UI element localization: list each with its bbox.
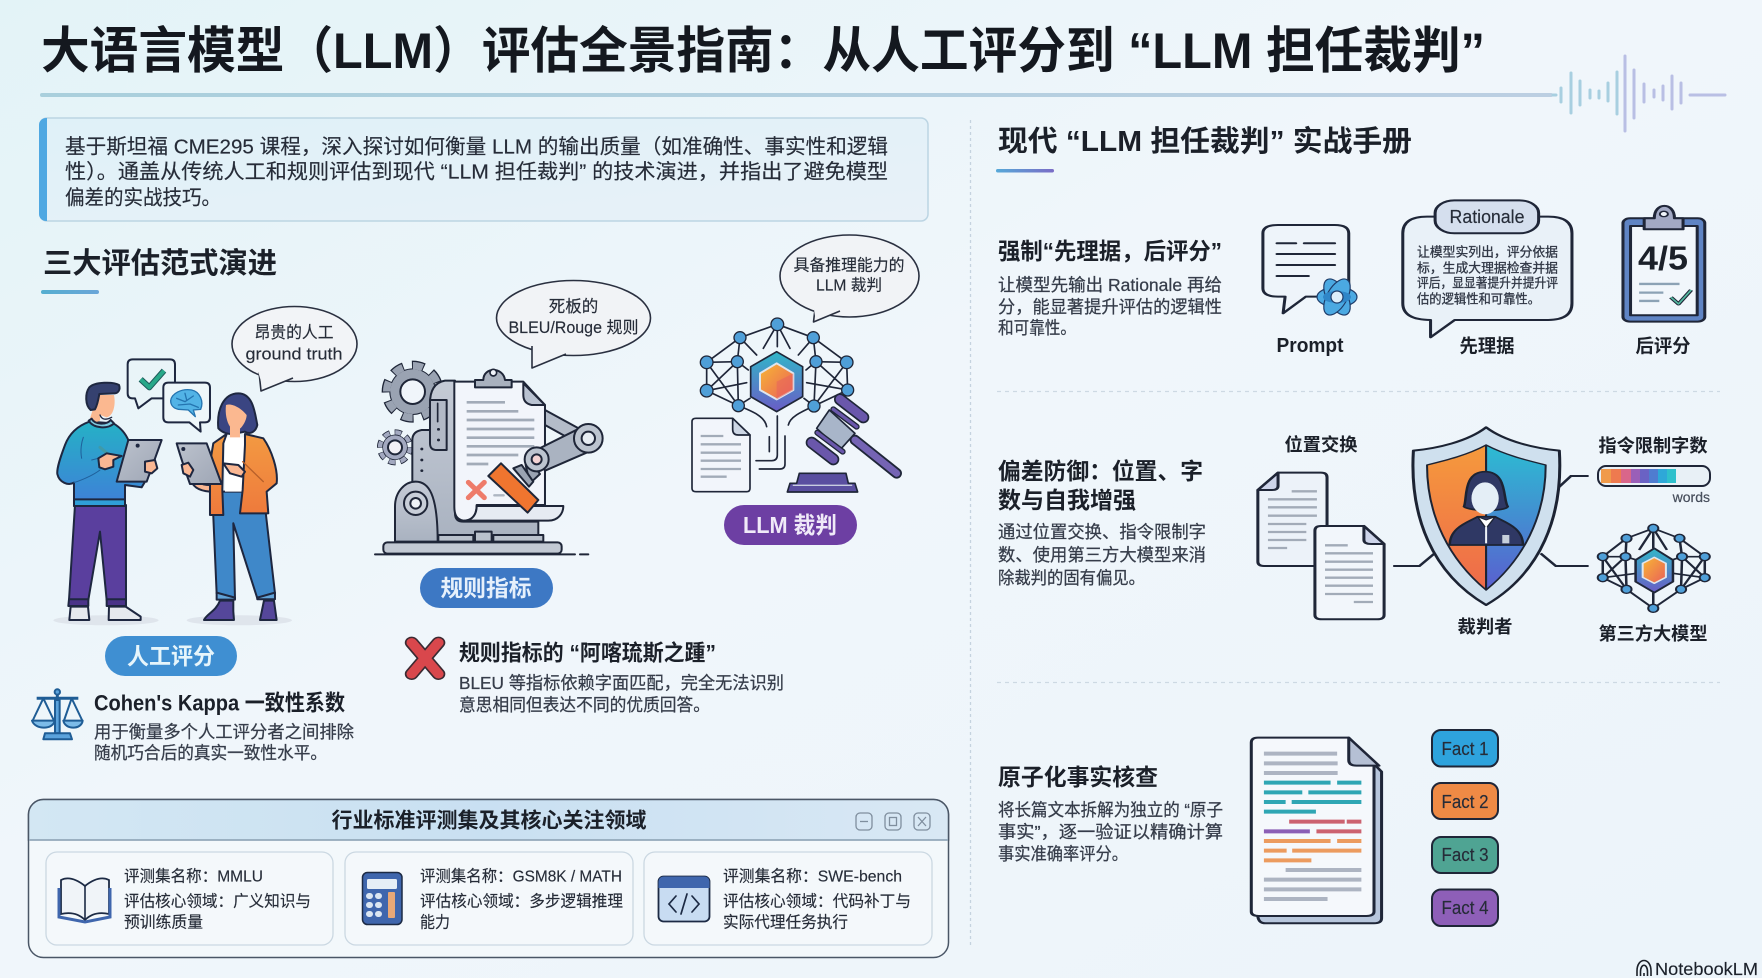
heading: three paradigms — [41, 247, 277, 294]
brain chat bubble — [163, 383, 210, 432]
pill: rule metrics: 规则指标 — [440, 575, 532, 601]
block text: bias defense: 除裁判的固有偏见。 — [998, 568, 1145, 588]
block text: bias defense: 数与自我增强 — [998, 487, 1136, 513]
machine body — [375, 381, 588, 554]
neural network — [700, 318, 854, 469]
card: MMLU: 评测集名称：MMLU — [124, 868, 263, 886]
pill: human scoring: 人工评分 — [127, 643, 215, 669]
gavel — [787, 399, 897, 492]
intro callout — [39, 118, 928, 221]
Achilles heel note: 规则指标的 “阿喀琉斯之踵” — [459, 640, 716, 666]
panel: benchmark datasets — [28, 800, 948, 958]
icon: judge shield — [1413, 427, 1560, 605]
chip: Fact 2 — [1432, 783, 1498, 819]
chip: Fact 3: Fact 3 — [1442, 845, 1488, 865]
label: word limit: 指令限制字数 — [1598, 435, 1708, 456]
title rule with audio waveform — [40, 56, 1725, 131]
speech bubble: expensive human ground truth — [232, 306, 357, 391]
icon: score clipboard: 4/5 — [1638, 240, 1688, 276]
speech bubble: reasoning LLM judge: LLM 裁判 — [816, 276, 882, 294]
Cohen's Kappa note: 随机巧合后的真实一致性水平。 — [94, 743, 327, 763]
speech bubble: reasoning LLM judge: 具备推理能力的 — [794, 256, 904, 274]
block text: atomic fact check — [998, 764, 1223, 864]
chip: Fact 2: Fact 2 — [1442, 792, 1488, 812]
block text: rationale first: 强制“先理据，后评分” — [998, 238, 1222, 264]
Achilles heel note: BLEU 等指标依赖字面匹配，完全无法识别 — [459, 673, 784, 693]
block text: rationale first: 让模型先输出 Rationale 再给 — [998, 275, 1222, 295]
check chat bubble — [128, 359, 175, 408]
rationale speech bubble: 让模型实列出，评分依据 — [1417, 244, 1558, 260]
man upper body — [57, 383, 162, 506]
block text: bias defense: 通过位置交换、指令限制字 — [998, 522, 1206, 542]
rear arm — [545, 410, 582, 442]
block text: atomic fact check: 事实”，逐一验证以精确计算 — [998, 822, 1223, 842]
block text: rationale first: 分，能显著提升评估的逻辑性 — [998, 297, 1222, 317]
label: post score: 后评分 — [1636, 336, 1690, 356]
legs and shoes — [53, 492, 292, 625]
woman upper body — [177, 393, 277, 515]
judge figure — [1450, 472, 1523, 545]
icon: third-party model network — [1598, 524, 1710, 612]
block text: rationale first: 和可靠性。 — [998, 318, 1076, 338]
pill: rule metrics — [420, 568, 553, 608]
label: judge: 裁判者 — [1458, 617, 1512, 637]
card: GSM8K / MATH — [345, 852, 633, 945]
speech bubble: rigid BLEU/Rouge rules: BLEU/Rouge 规则 — [508, 318, 638, 337]
block text: bias defense: 偏差防御：位置、字 — [998, 458, 1203, 484]
pill: LLM judge — [724, 505, 857, 545]
heading: LLM judge playbook: 现代 “LLM 担任裁判” 实战手册 — [998, 125, 1412, 158]
Cohen's Kappa note — [94, 690, 354, 763]
card: MMLU: 预训练质量 — [124, 914, 203, 932]
connector lines to shield — [1393, 476, 1589, 566]
heading: three paradigms: 三大评估范式演进 — [43, 247, 277, 280]
chip: Fact 4 — [1432, 890, 1498, 926]
Achilles heel note — [459, 640, 784, 715]
card: GSM8K / MATH: 评估核心领域：多步逻辑推理 — [420, 892, 623, 910]
intro callout: 偏差的实战技巧。 — [65, 186, 221, 210]
label: third-party model: 第三方大模型 — [1598, 623, 1708, 644]
icon: decomposed document — [1251, 738, 1382, 923]
card: SWE-bench: 评测集名称：SWE-bench — [723, 868, 902, 886]
icon: score clipboard — [1623, 206, 1705, 322]
block text: bias defense — [998, 458, 1206, 588]
document — [692, 418, 750, 492]
icon: swapped documents — [1258, 473, 1384, 619]
block text: atomic fact check: 原子化事实核查 — [998, 764, 1158, 790]
rationale speech bubble: Rationale — [1450, 207, 1524, 227]
word limit gauge: words — [1672, 489, 1710, 505]
chip: Fact 3 — [1432, 837, 1498, 873]
Cohen's Kappa note: 用于衡量多个人工评分者之间排除 — [94, 722, 354, 742]
card: SWE-bench — [644, 852, 932, 945]
speech bubble: expensive human ground truth: 昂贵的人工 — [254, 323, 334, 342]
panel heading: 行业标准评测集及其核心关注领域 — [332, 808, 646, 832]
rationale speech bubble — [1403, 200, 1572, 337]
word limit gauge — [1598, 466, 1710, 505]
Cohen's Kappa note: Cohen's Kappa 一致性系数 — [94, 690, 345, 716]
illustration: LLM judge — [692, 318, 897, 492]
speech bubble: rigid BLEU/Rouge rules — [496, 280, 650, 368]
block text: atomic fact check: 将长篇文本拆解为独立的 “原子 — [998, 800, 1223, 820]
rationale speech bubble: 评后，显显著提升并提升评 — [1417, 276, 1558, 290]
label: position swap: 位置交换 — [1284, 434, 1358, 455]
pill: LLM judge: LLM 裁判 — [743, 512, 837, 538]
intro callout: 基于斯坦福 CME295 课程，深入探讨如何衡量 LLM 的输出质量（如准确性、事实性和逻辑 — [65, 136, 888, 158]
speech bubble: reasoning LLM judge — [780, 235, 919, 322]
rationale speech bubble: 估的逻辑性和可靠性。 — [1417, 292, 1540, 306]
label: Prompt: Prompt — [1276, 335, 1344, 357]
label: rationale: 先理据 — [1460, 336, 1514, 356]
intro callout: 性）。通盖从传统人工和规则评估到现代 “LLM 担任裁判” 的技术演进，并指出了避免模型 — [65, 160, 888, 184]
card: GSM8K / MATH: 能力 — [420, 914, 450, 932]
rationale speech bubble: 标，生成大理据检查并据 — [1417, 260, 1558, 276]
chip: Fact 4: Fact 4 — [1442, 898, 1488, 918]
card: SWE-bench: 实际代理任务执行 — [723, 914, 848, 932]
title: 大语言模型（LLM）评估全景指南：从人工评分到 “LLM 担任裁判” — [41, 23, 1485, 79]
stamp arm — [488, 424, 603, 513]
card: MMLU — [46, 852, 333, 945]
card: SWE-bench: 评估核心领域：代码补丁与 — [723, 892, 911, 910]
speech bubble: rigid BLEU/Rouge rules: 死板的 — [549, 297, 598, 316]
chip: Fact 1 — [1432, 730, 1498, 766]
icon: red cross — [412, 643, 438, 674]
window buttons — [856, 813, 930, 830]
speech bubble: expensive human ground truth: ground truth — [246, 344, 342, 364]
illustration: rule machine — [375, 366, 603, 554]
block text: bias defense: 数、使用第三方大模型来消 — [998, 545, 1206, 565]
pill: human scoring — [105, 636, 237, 676]
heading: LLM judge playbook — [996, 125, 1412, 172]
chip: Fact 1: Fact 1 — [1442, 739, 1488, 759]
block text: atomic fact check: 事实准确率评分。 — [998, 844, 1128, 864]
icon: prompt bubble — [1263, 225, 1357, 319]
illustration: human evaluators — [53, 359, 292, 625]
gears — [380, 366, 439, 462]
document — [454, 369, 563, 521]
block text: rationale first — [998, 238, 1222, 338]
icon: balance scale — [32, 689, 83, 739]
card: GSM8K / MATH: 评测集名称：GSM8K / MATH — [420, 868, 622, 886]
card: MMLU: 评估核心领域：广义知识与 — [124, 892, 311, 910]
Achilles heel note: 意思相同但表达不同的优质回答。 — [459, 695, 710, 715]
